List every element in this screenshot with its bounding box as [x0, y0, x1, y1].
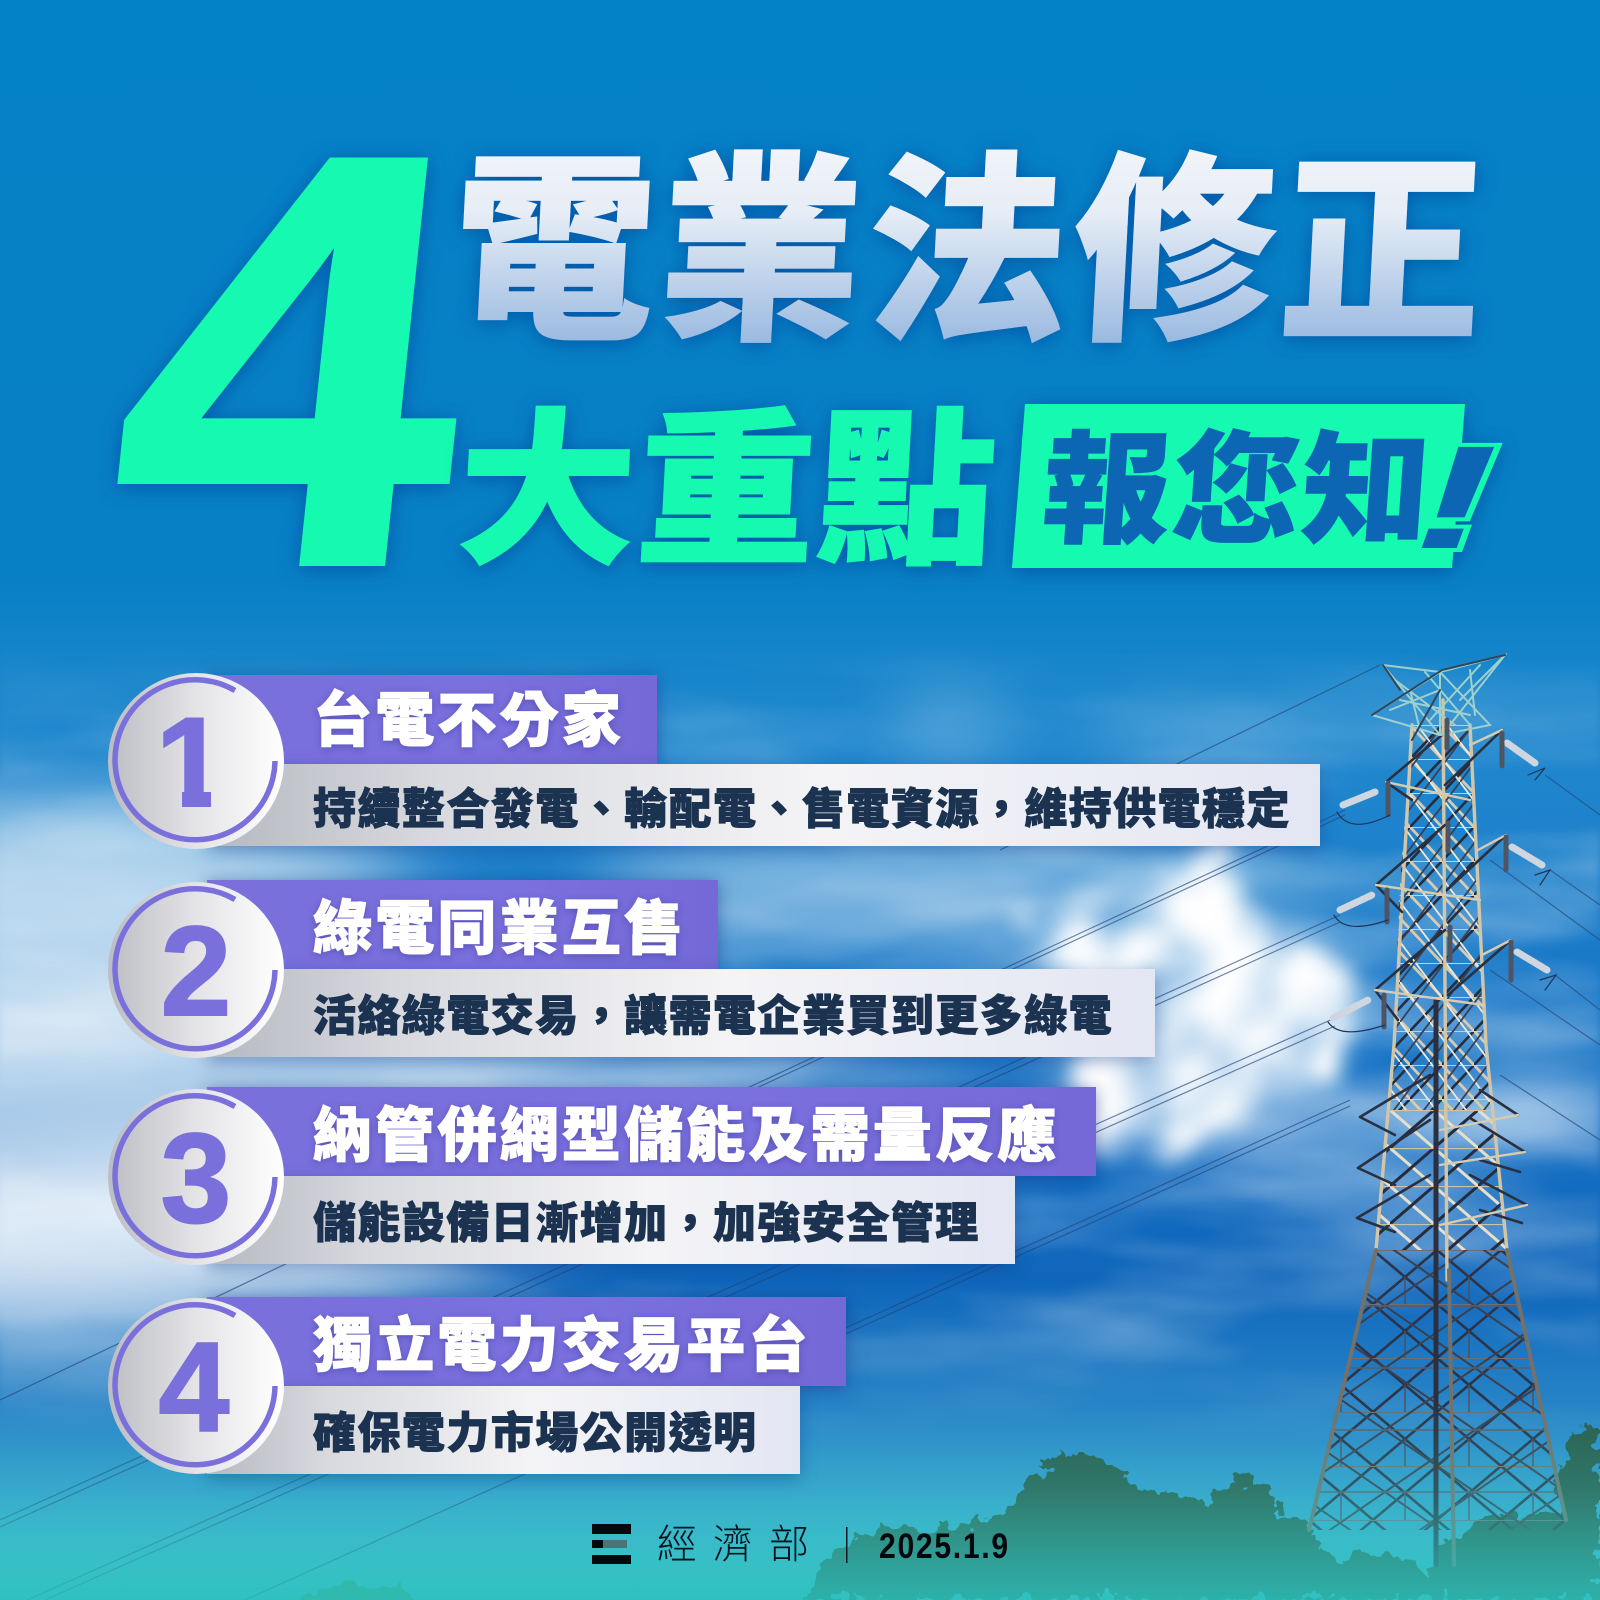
side cross-arms [1357, 730, 1527, 1232]
tower top cage [1372, 655, 1505, 735]
item 4 heading [207, 1297, 846, 1386]
ministry name: 經濟部 [657, 1512, 825, 1570]
item 4 description text: 確保電力市場公開透明 [313, 1399, 758, 1461]
item 4 number badge: 4 [159, 1316, 229, 1458]
date: 2025.1.9 [879, 1526, 1010, 1566]
item 1 description bar [207, 764, 1320, 846]
item 2 heading text: 綠電同業互售 [313, 881, 686, 966]
item 1 heading text: 台電不分家 [313, 673, 624, 758]
item 4 number badge [108, 1298, 284, 1474]
item 3 heading text: 納管併網型儲能及需量反應 [313, 1088, 1059, 1173]
item 3: 納管併網型儲能及需量反應 [108, 1077, 1108, 1278]
title line 1: 電業法修正 [446, 90, 1496, 382]
background: sky photograph with clouds [0, 616, 1600, 1600]
item 2 number badge [108, 882, 284, 1058]
highlighted box: 報您知!: 報您知 [1038, 391, 1439, 568]
item 4: 獨立電力交易平台 [108, 1288, 854, 1488]
item 3 description text: 儲能設備日漸增加，加強安全管理 [313, 1189, 980, 1251]
item 1 heading [207, 675, 657, 764]
item 1 number badge [108, 673, 284, 849]
item 4 heading text: 獨立電力交易平台 [313, 1298, 811, 1383]
item 2 description bar [207, 969, 1155, 1057]
item 2 number badge: 2 [161, 900, 231, 1042]
item 1 number badge: 1 [156, 691, 226, 833]
icon: ministry logo mark [592, 1524, 631, 1564]
item 1 description text: 持續整合發電、輸配電、售電資源，維持供電穩定 [313, 775, 1291, 837]
teal bottom gradient [0, 1400, 1600, 1600]
item 2 description text: 活絡綠電交易，讓需電企業買到更多綠電 [313, 982, 1113, 1044]
item 2 heading [207, 880, 718, 969]
title line 2: 大重點 [452, 355, 1004, 598]
highlighted box: 報您知!: ! [1386, 415, 1529, 580]
insulators [1333, 743, 1547, 1018]
item 4 description bar [207, 1386, 800, 1474]
item 2: 綠電同業互售 [108, 871, 1166, 1074]
item 3 heading [207, 1087, 1096, 1176]
divider [846, 1527, 848, 1563]
item 1: 台電不分家 [108, 669, 1326, 862]
tower lattice body [1309, 725, 1566, 1530]
tower legs and mast [1309, 700, 1566, 1565]
item 3 description bar [207, 1176, 1015, 1264]
item 3 number badge [108, 1089, 284, 1265]
item 3 number badge: 3 [161, 1107, 231, 1249]
big numeral 4: 4 [90, 33, 501, 687]
